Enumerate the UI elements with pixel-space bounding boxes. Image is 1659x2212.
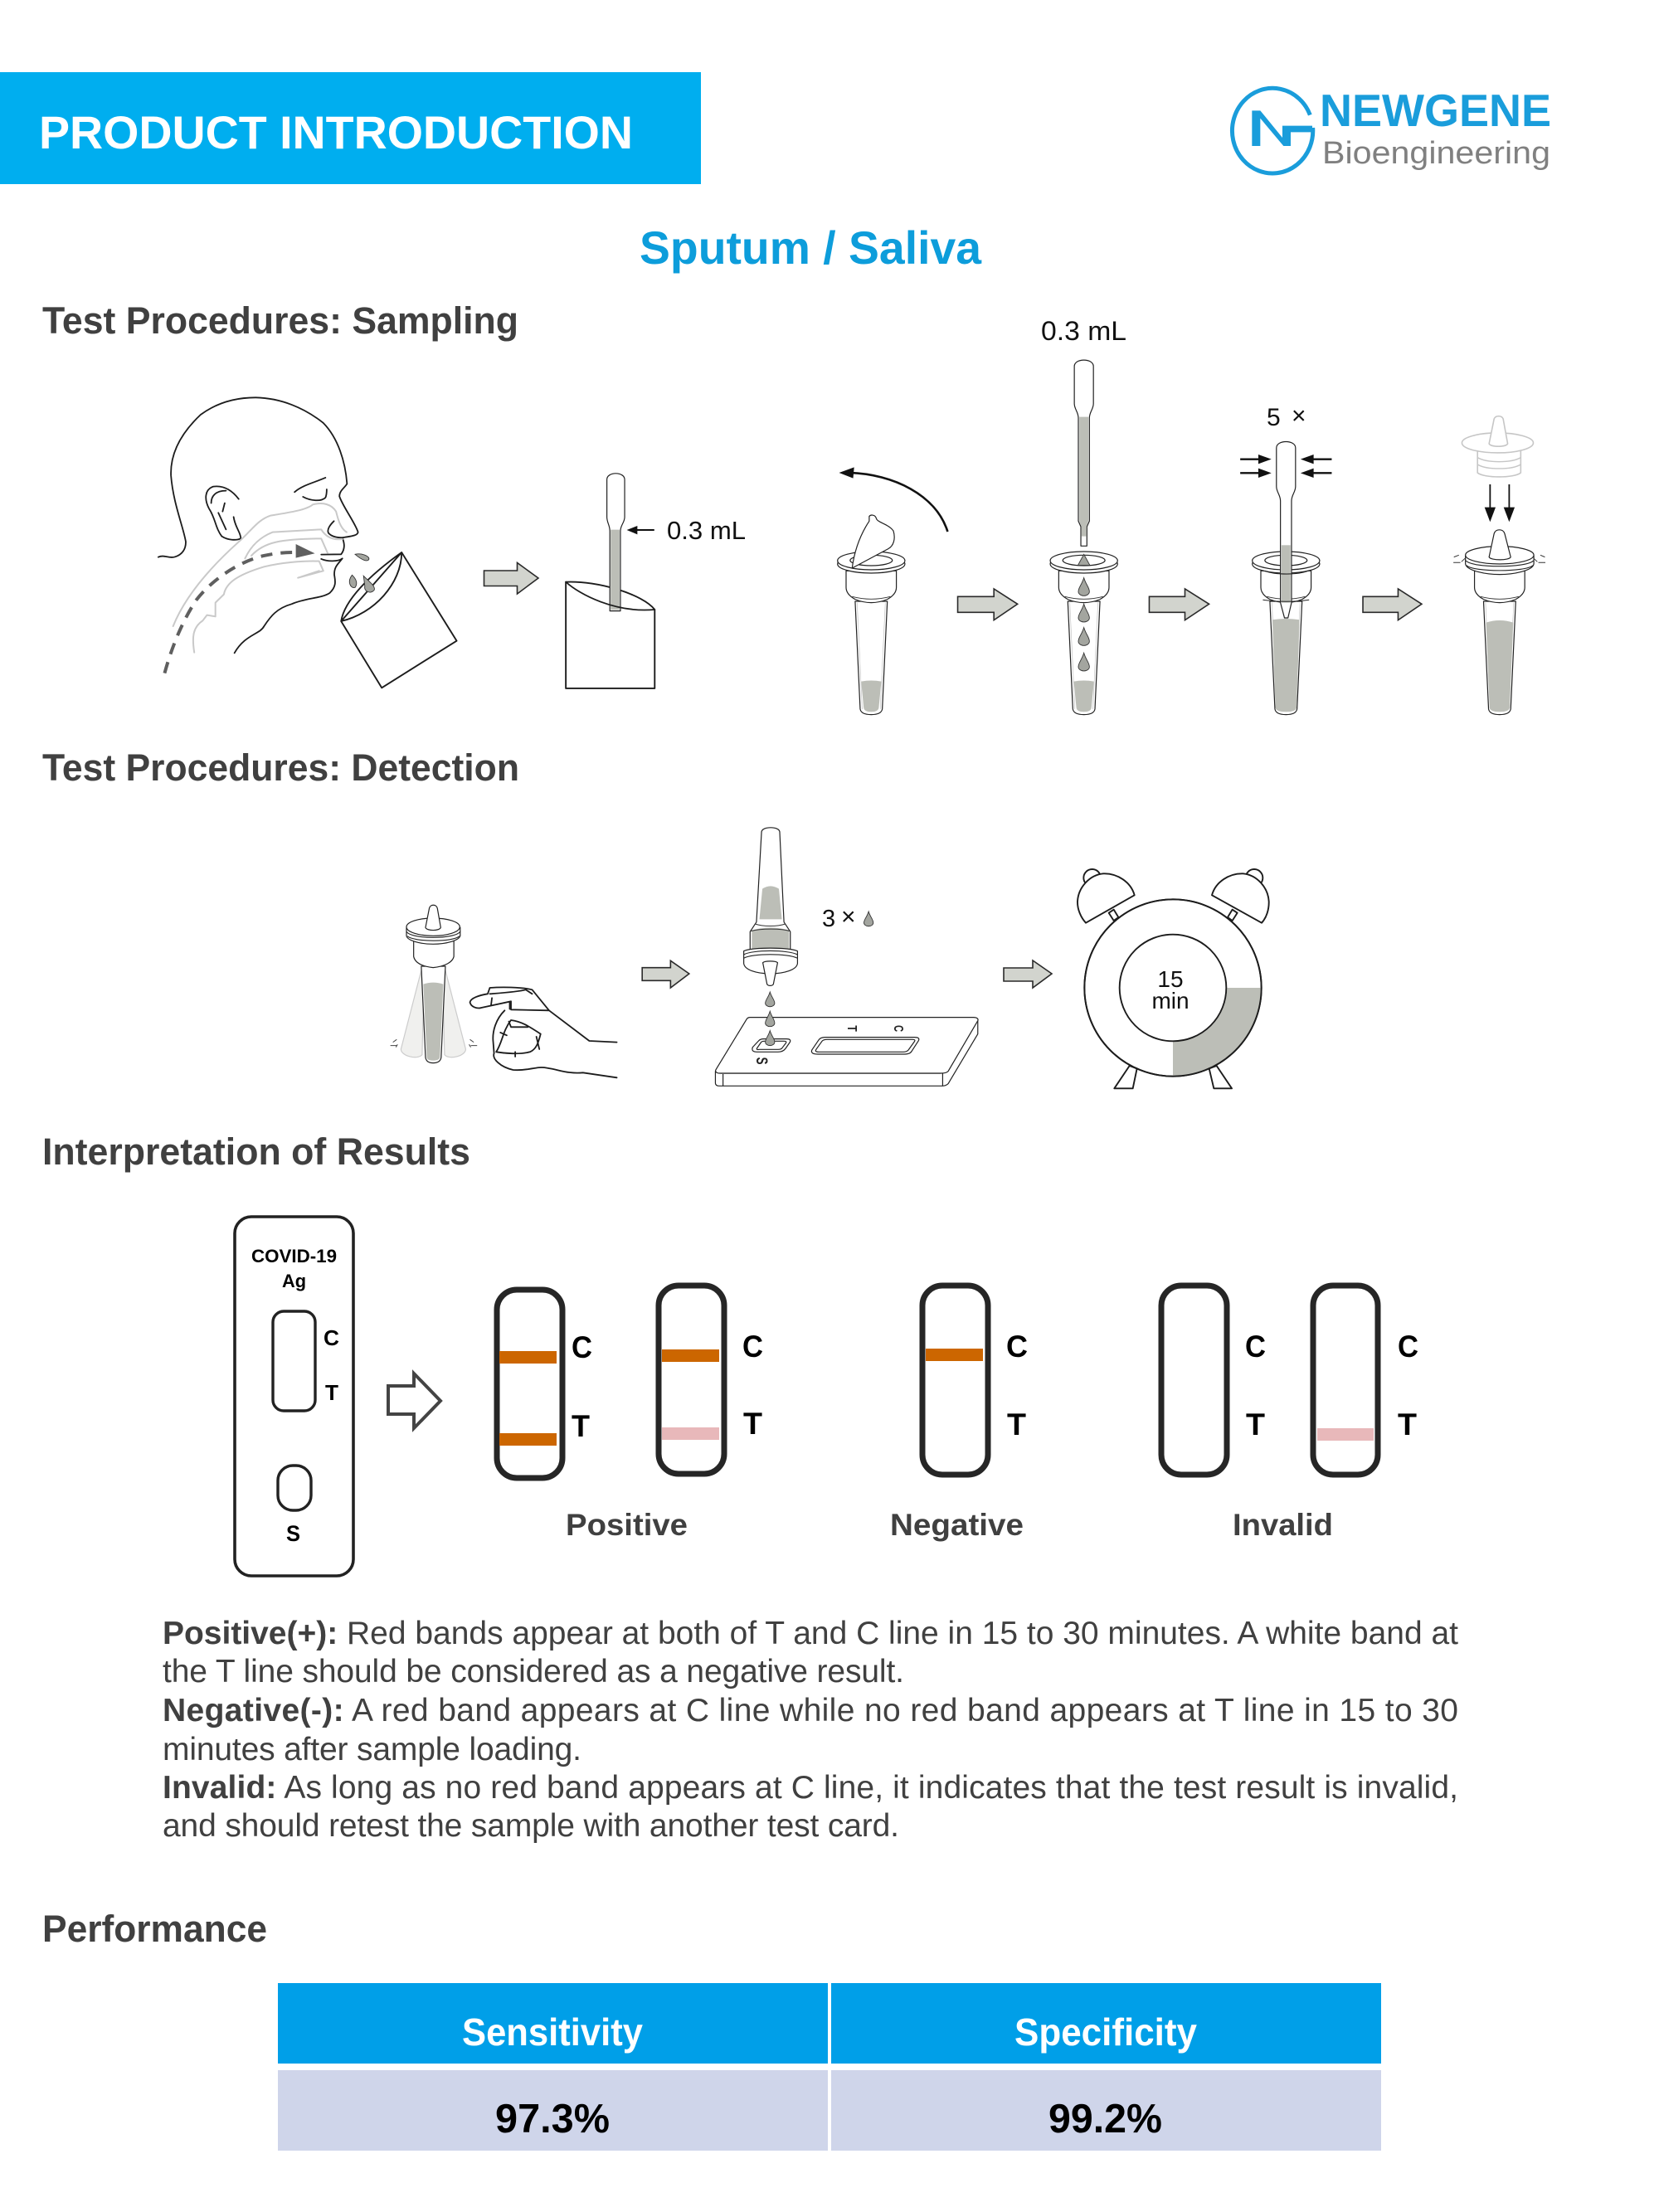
illustration: alarm clock 15 min xyxy=(1078,869,1269,1088)
outline arrow xyxy=(388,1373,440,1428)
illustration: detection sequence xyxy=(391,828,978,1086)
heading: detection: Test Procedures: Detection xyxy=(42,746,519,789)
drop icon xyxy=(864,912,873,926)
arrow head xyxy=(296,544,315,558)
strip: negative: T xyxy=(1007,1407,1026,1441)
strip: invalid 2: T xyxy=(1398,1407,1417,1441)
bell posts xyxy=(1109,910,1238,921)
pipette xyxy=(607,474,625,611)
strip: positive 2: C xyxy=(742,1330,763,1364)
volume label: 0.3 mL xyxy=(667,516,746,545)
test card diagram xyxy=(235,1217,353,1576)
airway lines xyxy=(173,503,347,653)
clock face xyxy=(1084,899,1262,1077)
value: sensitivity: 97.3% xyxy=(495,2097,610,2142)
strip: invalid 2: C xyxy=(1398,1330,1418,1364)
pointer arrow xyxy=(635,529,654,531)
card title: COVID-19 xyxy=(251,1246,337,1266)
bells xyxy=(1078,873,1269,923)
interpretation text block: and should retest the sample with another test card. xyxy=(163,1808,899,1844)
saliva cup xyxy=(341,552,457,688)
elapsed sector xyxy=(1173,988,1262,1077)
dropper xyxy=(744,828,797,985)
arrow xyxy=(1149,589,1209,620)
card window xyxy=(273,1311,315,1411)
drops count label: × xyxy=(841,903,856,931)
inner dial xyxy=(1120,935,1226,1041)
removal curved arrow xyxy=(849,473,947,532)
strip: positive 2 xyxy=(659,1286,763,1474)
card labels: C xyxy=(324,1325,339,1350)
arrow xyxy=(1363,589,1422,620)
header: sensitivity xyxy=(278,1983,828,2064)
heading: interpretation: Interpretation of Results xyxy=(42,1130,470,1173)
test cassette xyxy=(715,1018,978,1086)
strip: negative xyxy=(922,1286,1028,1475)
flicking hand xyxy=(470,987,617,1077)
arrow xyxy=(642,960,689,988)
card subtitle: Ag xyxy=(282,1271,306,1291)
banner title: PRODUCT INTRODUCTION xyxy=(39,106,633,158)
cup opening xyxy=(566,582,654,610)
illustration: person spitting into cup xyxy=(158,397,457,688)
ear xyxy=(206,486,241,540)
header banner xyxy=(0,72,701,184)
interpretation text block xyxy=(163,1616,1458,1844)
shaken tube xyxy=(406,905,460,1063)
interpretation text block: the T line should be considered as a negative result. xyxy=(163,1654,904,1689)
bell knobs xyxy=(1083,869,1262,887)
cup xyxy=(566,582,654,688)
strip: invalid 1 xyxy=(1161,1286,1266,1475)
header: specificity xyxy=(831,1983,1381,2064)
inhale dashed arrow xyxy=(164,552,296,673)
strip: negative: C xyxy=(1006,1330,1028,1364)
value: specificity xyxy=(831,2070,1381,2151)
interpretation text block: Positive(+): Red bands appear at both of T and C line in 15 to 30 minutes. A white band at xyxy=(163,1616,1458,1651)
logo mark xyxy=(1232,88,1313,173)
cassette labels: C xyxy=(892,1025,907,1032)
clock rim xyxy=(1084,899,1262,1077)
tube 3: squeeze pipette xyxy=(1253,441,1320,715)
strip: invalid 1: C xyxy=(1245,1330,1266,1364)
logo: Newgene Bioengineering xyxy=(1232,85,1551,173)
result label: positive: Positive xyxy=(566,1508,688,1542)
test card diagram: T xyxy=(325,1380,338,1405)
squeeze count label: × xyxy=(1292,402,1306,430)
interpretation text block: Invalid: As long as no red band appears at C line, it indicates that the test result is invalid, xyxy=(163,1770,1458,1806)
illustration: pipette in cup, 0.3 mL xyxy=(566,474,654,688)
value: sensitivity xyxy=(278,2070,828,2151)
down arrows xyxy=(1485,484,1515,522)
header: sensitivity: Sensitivity xyxy=(462,2010,643,2054)
shaken tube ghosts xyxy=(391,970,477,1057)
timer label: min xyxy=(1151,988,1190,1014)
pipette liquid xyxy=(611,530,620,610)
strip: invalid 1: T xyxy=(1246,1407,1265,1441)
cassette labels: S xyxy=(752,1057,770,1064)
drops count label: 3 xyxy=(822,906,835,932)
strip: positive 1 xyxy=(497,1290,592,1478)
curved arrow head xyxy=(839,467,854,479)
detached cap xyxy=(1462,416,1533,477)
header: specificity: Specificity xyxy=(1014,2010,1197,2054)
result label: negative: Negative xyxy=(890,1508,1024,1542)
value: specificity: 99.2% xyxy=(1048,2097,1162,2142)
pointer head xyxy=(627,526,637,534)
heading: sampling: Test Procedures: Sampling xyxy=(42,299,518,342)
cassette labels xyxy=(752,1025,907,1064)
main title: Sputum / Saliva xyxy=(640,221,982,274)
strip: positive 1: T xyxy=(572,1409,590,1443)
arrow xyxy=(484,562,538,594)
logo subtitle: Bioengineering xyxy=(1322,136,1550,171)
tube 2: adding drops xyxy=(1050,360,1117,715)
tube 1: open foil xyxy=(838,515,905,715)
falling drops xyxy=(766,992,775,1046)
sample well xyxy=(278,1466,311,1510)
arrow xyxy=(958,589,1018,620)
tube 4: capped xyxy=(1453,530,1545,715)
cassette labels: T xyxy=(845,1025,860,1032)
saliva droplets xyxy=(349,554,374,592)
illustration: sampling tubes sequence xyxy=(838,360,1545,715)
result label: invalid: Invalid xyxy=(1233,1508,1333,1542)
eye and brow xyxy=(294,478,327,500)
timer label: 15 xyxy=(1157,966,1184,992)
logo wordmark: NEWGENE xyxy=(1320,85,1551,136)
squeeze count label: 5 xyxy=(1267,404,1281,431)
nostril xyxy=(328,521,343,537)
head outline xyxy=(158,397,358,653)
squeeze arrows xyxy=(1240,455,1331,478)
strip: positive 1: C xyxy=(572,1330,592,1364)
heading: performance: Performance xyxy=(42,1908,267,1950)
clock feet xyxy=(1114,1066,1232,1088)
interpretation text block: Negative(-): A red band appears at C line while no red band appears at T line in 15 to 30 xyxy=(163,1693,1458,1728)
strip: invalid 2 xyxy=(1313,1286,1418,1475)
interpretation text block: minutes after sample loading. xyxy=(163,1732,581,1767)
performance table xyxy=(278,1983,1381,2151)
test card diagram: S xyxy=(286,1521,300,1546)
top volume label: 0.3 mL xyxy=(1041,316,1126,346)
arrow to timer xyxy=(1004,960,1052,988)
strip: positive 2: T xyxy=(743,1407,762,1441)
timer label xyxy=(1151,966,1190,1014)
